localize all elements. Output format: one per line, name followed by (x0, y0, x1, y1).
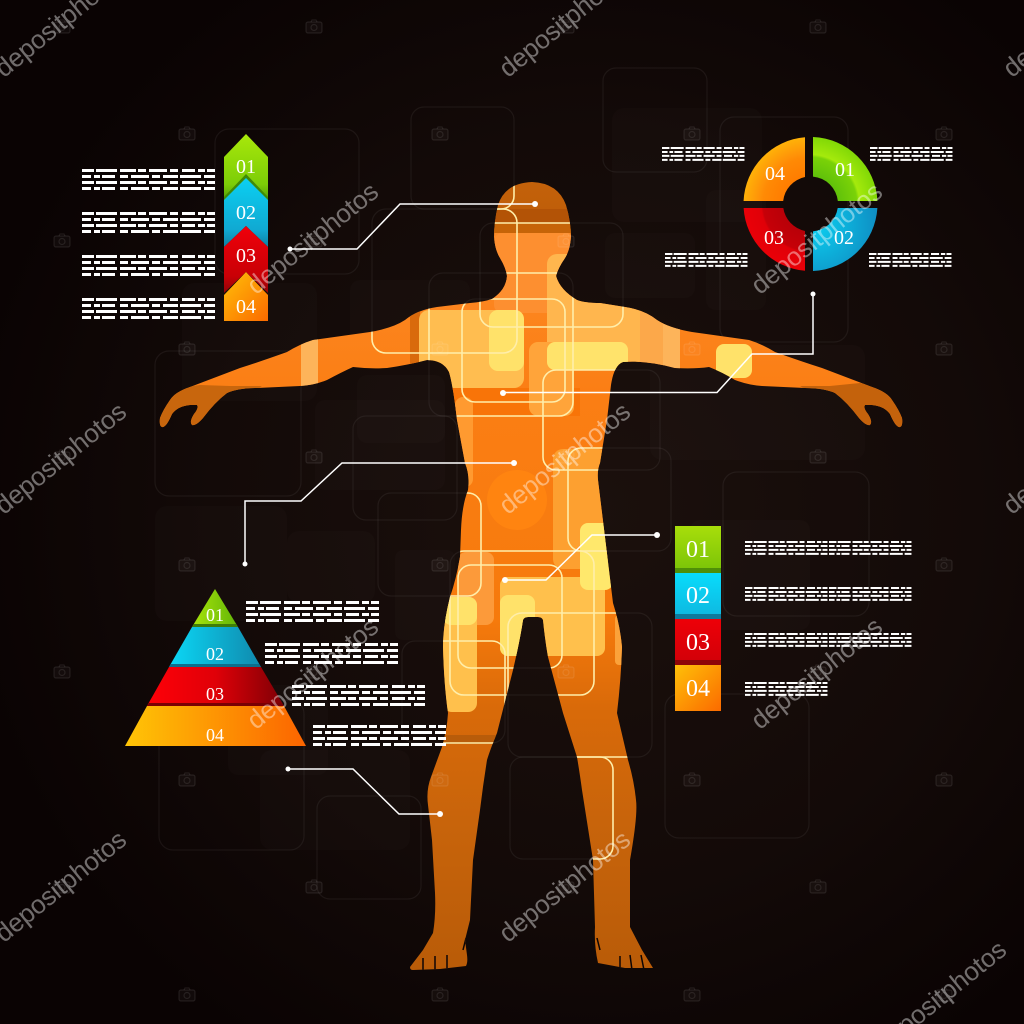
bar 04 (675, 665, 721, 711)
donut text blocks (662, 147, 952, 267)
watermarks: depositphotos (241, 176, 384, 300)
pyramid text blocks (246, 601, 446, 746)
segment 04: 04 (765, 163, 785, 185)
watermarks: depositphotos (493, 824, 636, 948)
bar 01 (675, 526, 721, 573)
bar 03: 03 (686, 630, 710, 656)
bar 02 (675, 573, 721, 619)
tier 01 (192, 589, 238, 627)
watermarks: depositphotos (493, 396, 636, 520)
head shading (494, 209, 570, 223)
arrow 04 (224, 272, 268, 321)
arrow 02: 02 (236, 202, 256, 224)
tier 04: 04 (206, 725, 224, 745)
segment 02: 02 (834, 227, 854, 249)
bar 04: 04 (686, 676, 710, 702)
human body silhouette (160, 182, 902, 970)
tier 03 (147, 667, 284, 706)
arrow stack chart (224, 134, 268, 321)
tier 04 (125, 706, 306, 746)
arrow 02 (224, 178, 268, 247)
arrow 01 (224, 134, 268, 201)
faint background panels (155, 68, 869, 899)
segment 01: 01 (835, 159, 855, 181)
watermarks: depositphotos (745, 176, 888, 300)
bar list text blocks (745, 541, 911, 696)
arrow stack text blocks (82, 169, 215, 319)
arrow 01: 01 (236, 156, 256, 178)
bar list chart (675, 526, 721, 711)
tier 02 (169, 627, 261, 667)
bar 02: 02 (686, 583, 710, 609)
arrow 03: 03 (236, 245, 256, 267)
bar 01: 01 (686, 537, 710, 563)
watermarks: depositphotos (241, 611, 384, 735)
torso and leg colour blocks (419, 254, 752, 744)
bar 03 (675, 619, 721, 665)
tier 03: 03 (206, 684, 224, 704)
pyramid chart (125, 589, 306, 746)
toes (423, 938, 644, 970)
body outline boxes (371, 186, 628, 860)
watermarks: depositphotos (745, 611, 888, 735)
arrow 03 (224, 226, 268, 293)
connector lines (242, 201, 816, 817)
donut chart (744, 137, 877, 271)
arm shading (160, 311, 902, 428)
tier 02: 02 (206, 644, 224, 664)
arrow 04: 04 (236, 296, 256, 318)
segment 03: 03 (764, 227, 784, 249)
tier 01: 01 (206, 605, 224, 625)
